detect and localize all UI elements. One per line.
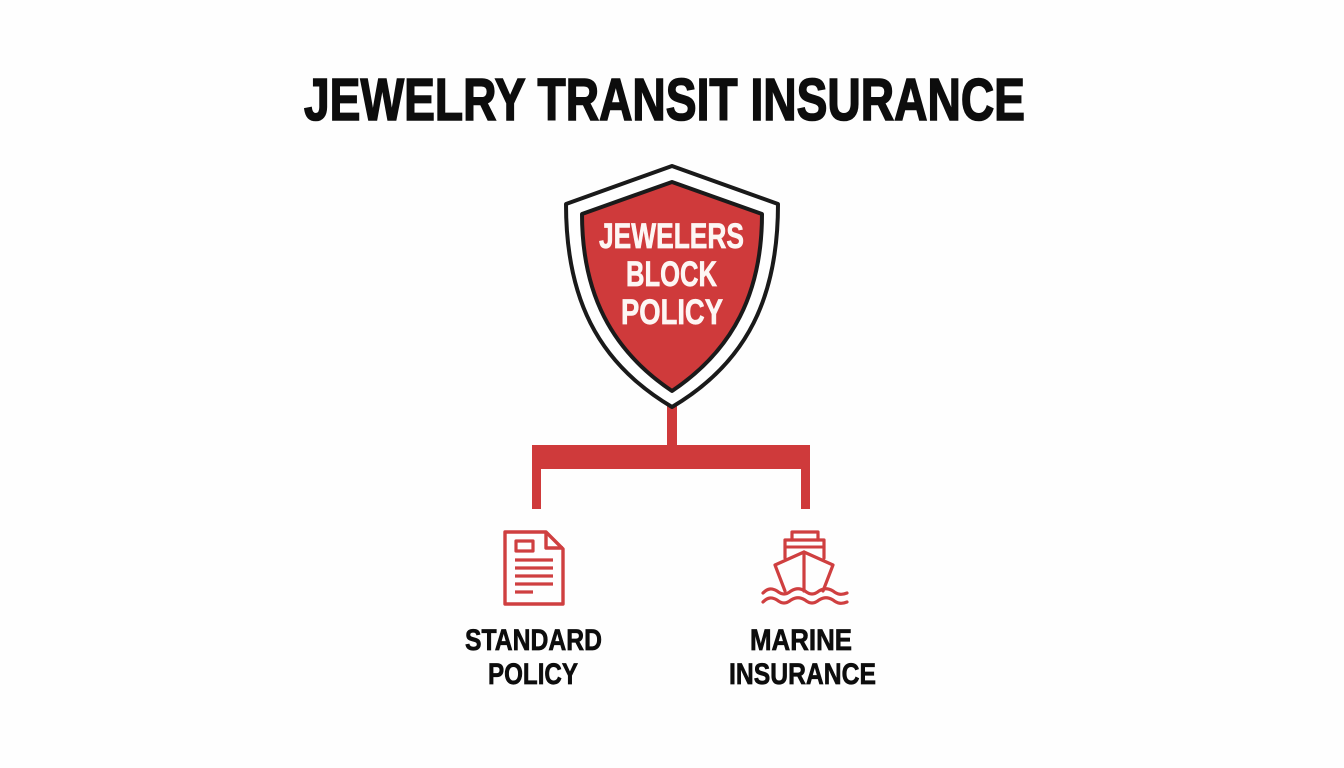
label: standard policy: STANDARD xyxy=(465,624,602,657)
label: marine insurance: INSURANCE xyxy=(729,658,876,691)
shield label: POLICY xyxy=(621,293,723,332)
label: marine insurance: MARINE xyxy=(750,624,852,657)
label: standard policy xyxy=(465,624,602,691)
icon: document xyxy=(505,532,563,604)
icon: ship xyxy=(763,532,847,603)
label: standard policy: POLICY xyxy=(488,658,578,691)
shield label: JEWELERS xyxy=(599,217,744,256)
connector: shield to branches xyxy=(532,405,810,509)
shield: jewelers block policy xyxy=(566,166,778,407)
label: marine insurance xyxy=(729,624,876,691)
shield label: BLOCK xyxy=(626,255,717,294)
shield label xyxy=(599,217,744,332)
title: JEWELRY TRANSIT INSURANCE xyxy=(304,67,1025,133)
